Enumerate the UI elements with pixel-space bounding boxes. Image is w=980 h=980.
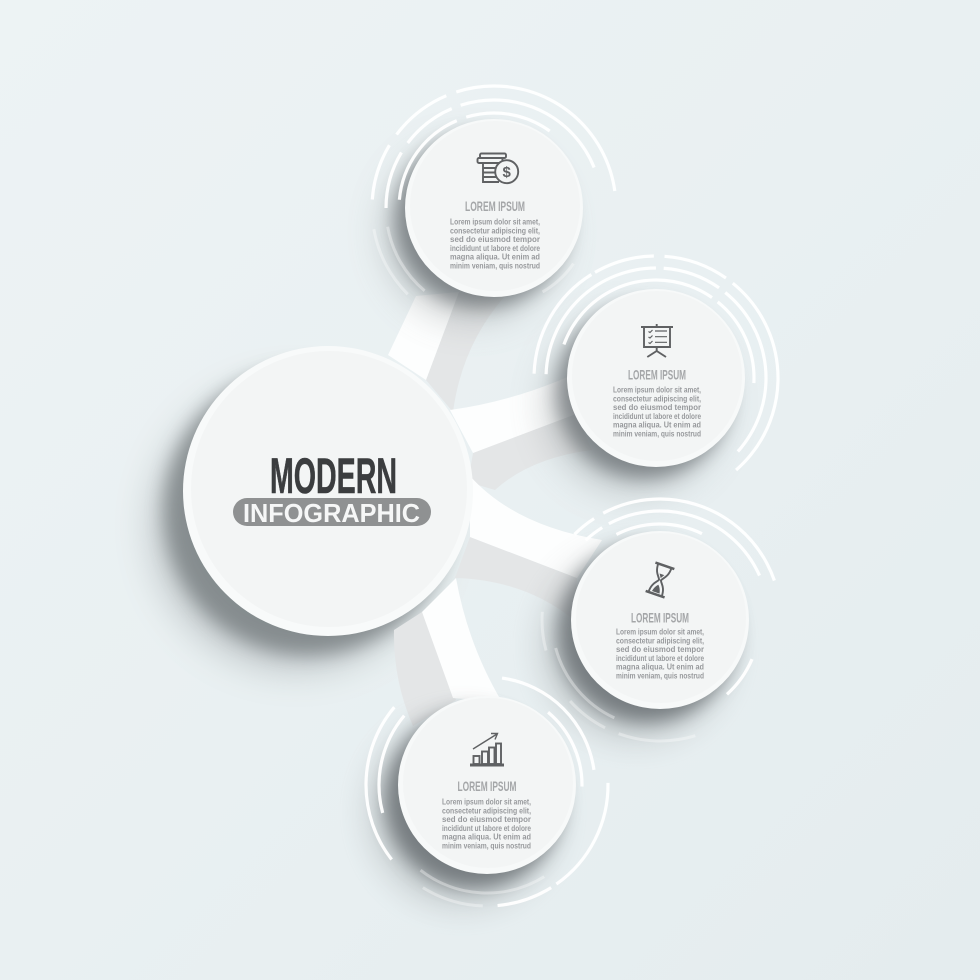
connector: main to node 3 xyxy=(455,476,602,620)
text block: Lorem ipsum dolor sit amet, xyxy=(450,218,540,226)
heading: LOREM IPSUM xyxy=(458,778,516,794)
text block: incididunt ut labore et dolore xyxy=(613,412,701,421)
subtitle pill: INFOGRAPHIC xyxy=(243,498,420,528)
text block: magna aliqua. Ut enim ad xyxy=(613,421,701,430)
text block xyxy=(442,798,531,850)
text block xyxy=(616,628,704,680)
panel: node 2 xyxy=(567,289,745,467)
connector: main to node 2 xyxy=(450,376,592,490)
title: MODERN xyxy=(270,448,397,504)
panel: node 4 xyxy=(398,696,576,874)
text block: minim veniam, quis nostrud xyxy=(450,262,540,270)
connector: main to node 4 xyxy=(394,578,502,726)
text block: Lorem ipsum dolor sit amet, xyxy=(613,386,701,394)
text block: minim veniam, quis nostrud xyxy=(616,672,704,680)
heading: LOREM IPSUM xyxy=(628,366,686,382)
heading: LOREM IPSUM xyxy=(631,610,689,626)
icon: rising bar chart xyxy=(470,734,504,765)
text block: minim veniam, quis nostrud xyxy=(613,430,701,438)
text block xyxy=(450,218,540,270)
text block: magna aliqua. Ut enim ad xyxy=(450,253,540,262)
text block xyxy=(613,386,701,438)
panel: node 1 xyxy=(405,119,583,297)
text block: consectetur adipiscing elit, xyxy=(442,806,531,815)
text block: consectetur adipiscing elit, xyxy=(616,636,704,645)
text block: Lorem ipsum dolor sit amet, xyxy=(616,628,704,636)
icon: coins: $ xyxy=(503,164,512,181)
rings: node 3 xyxy=(489,449,831,791)
rings: node 2 xyxy=(484,206,828,550)
text block: magna aliqua. Ut enim ad xyxy=(616,663,704,672)
rings: node 1 xyxy=(321,35,667,381)
node shadows xyxy=(373,133,736,902)
text block: incididunt ut labore et dolore xyxy=(616,654,704,663)
text block: sed do eiusmod tempor xyxy=(613,403,701,412)
icon: presentation board xyxy=(641,324,673,357)
connector: main to node 1 xyxy=(388,292,505,412)
text block: Lorem ipsum dolor sit amet, xyxy=(442,798,531,806)
text block: incididunt ut labore et dolore xyxy=(442,824,531,833)
text block: magna aliqua. Ut enim ad xyxy=(442,833,531,842)
text block: consectetur adipiscing elit, xyxy=(450,226,540,235)
text block: sed do eiusmod tempor xyxy=(450,235,540,244)
text block: sed do eiusmod tempor xyxy=(442,815,531,824)
main circle shadow xyxy=(152,367,452,670)
rings: node 4 xyxy=(317,615,657,955)
icon: coins xyxy=(478,154,518,183)
text block: consectetur adipiscing elit, xyxy=(613,394,701,403)
icon: hourglass xyxy=(646,563,674,597)
text block: sed do eiusmod tempor xyxy=(616,645,704,654)
panel: node 3 xyxy=(571,531,749,709)
text block: incididunt ut labore et dolore xyxy=(450,244,540,253)
text block: minim veniam, quis nostrud xyxy=(442,842,531,850)
heading: LOREM IPSUM xyxy=(465,198,525,214)
panel: main circle xyxy=(183,346,473,636)
